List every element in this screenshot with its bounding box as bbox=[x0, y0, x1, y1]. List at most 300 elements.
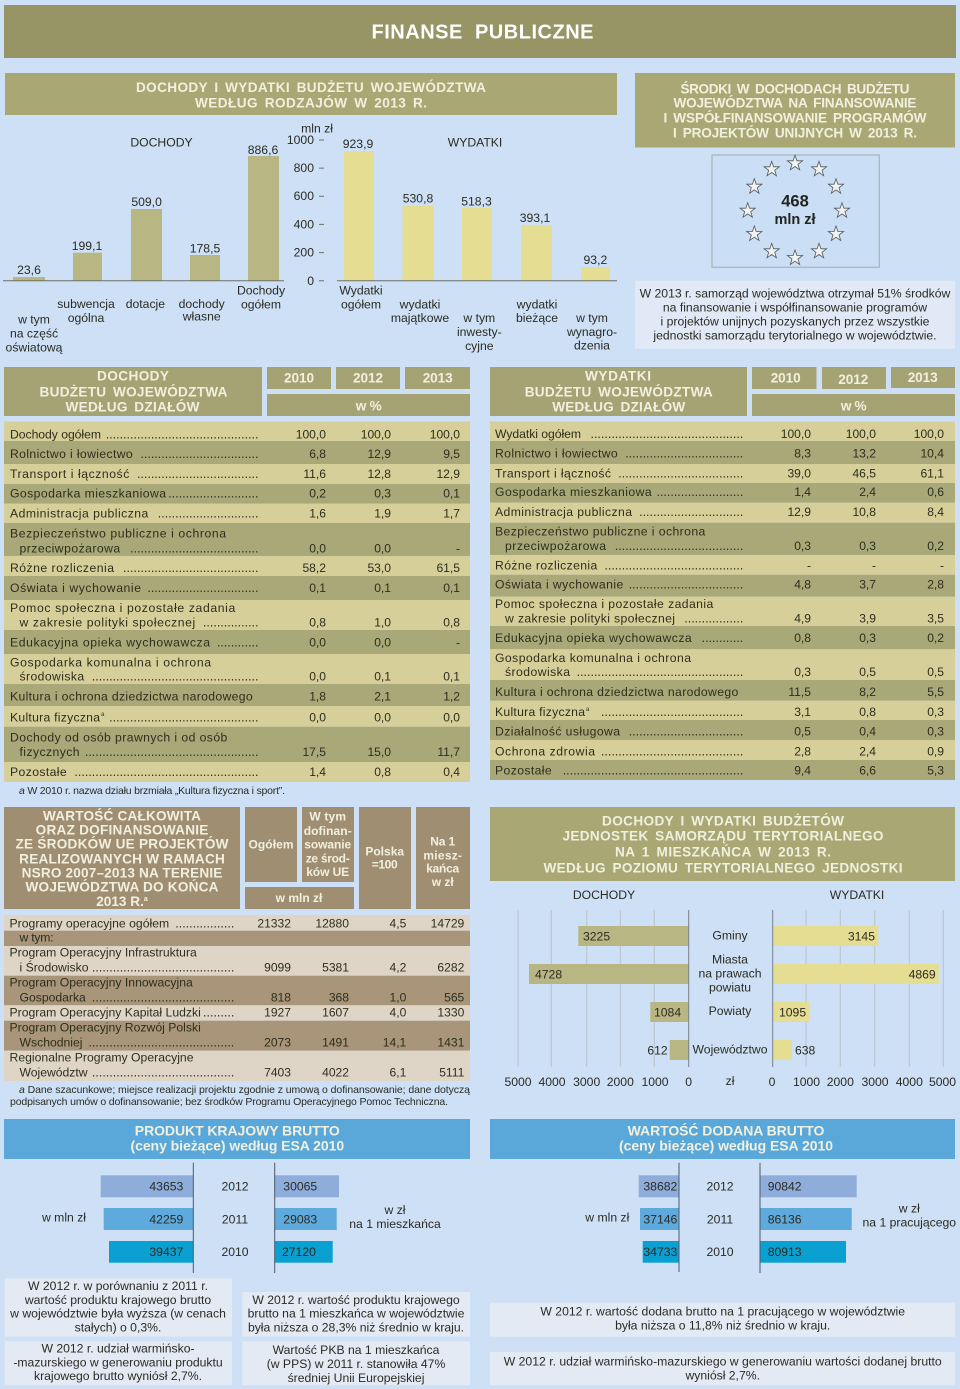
heading: gross value added: WARTOŚĆ DODANA BRUTTO bbox=[628, 1121, 824, 1138]
bar chart: revenue: ogółem bbox=[241, 298, 281, 312]
table header: EU projects: Na 1 bbox=[430, 834, 456, 848]
row: public safety: Bezpieczeństwo publiczne i ochrona bbox=[495, 524, 706, 538]
heading: per capita: DOCHODY I WYDATKI BUDŻETÓW bbox=[602, 813, 844, 828]
row: physical culture: 0,0 bbox=[374, 710, 391, 724]
row: income from persons: 15,0 bbox=[367, 745, 391, 759]
row: culture bbox=[4, 684, 470, 706]
panel: gross value added bbox=[490, 1119, 956, 1385]
row: infrastructure and environment: ......................................... bbox=[92, 961, 234, 975]
row: housing: 1,4 bbox=[794, 485, 811, 499]
table header: expenditure: 2010 bbox=[771, 371, 801, 386]
row: culture: 8,2 bbox=[859, 685, 876, 699]
row: education: 0,1 bbox=[443, 581, 460, 595]
row: total: ............................................ bbox=[106, 428, 258, 442]
heading: per capita: JEDNOSTEK SAMORZĄDU TERYTORIALNEGO bbox=[562, 829, 884, 844]
table header: revenue: 2010 bbox=[284, 371, 314, 386]
callout: EU funds note: i projektów unijnych pozyskanych przez wszystkie bbox=[661, 314, 930, 328]
bar chart: expenditure per capita: 4869 bbox=[909, 968, 936, 982]
panel: budget revenue and expenditure by type bbox=[3, 73, 617, 354]
bar chart: GDP per capita: 30065 bbox=[283, 1179, 317, 1193]
row: municipal economy: Gospodarka komunalna i ochrona bbox=[495, 651, 691, 665]
bar chart: GDP per capita: na 1 mieszkańca bbox=[349, 1217, 441, 1231]
row: social assistance: Pomoc społeczna i pozostałe zadania bbox=[495, 597, 714, 611]
row: settlements: ........................................ bbox=[604, 558, 743, 572]
row: regional programmes: Województw bbox=[20, 1066, 88, 1080]
bar chart: expenditure: bieżące bbox=[516, 311, 558, 325]
chart axis: zloty: 5000 bbox=[929, 1075, 956, 1089]
row: educational care: ............ bbox=[217, 636, 258, 650]
row: total: ............................................ bbox=[590, 427, 743, 441]
table header: EU projects: w zł bbox=[431, 875, 454, 889]
bar chart: revenue: ogólna bbox=[68, 311, 105, 325]
row: physical culture: Kultura fizyczna bbox=[495, 705, 585, 719]
row: public administration: .............................. bbox=[639, 505, 743, 519]
row: agriculture: 8,3 bbox=[794, 446, 811, 460]
row: educational care: - bbox=[456, 636, 460, 650]
row: total: 100,0 bbox=[430, 428, 460, 442]
row: transport bbox=[4, 464, 470, 484]
heading: per capita: WEDŁUG POZIOMU TERYTORIALNEGO JEDNOSTKI bbox=[544, 861, 902, 876]
row: physical culture bbox=[4, 706, 470, 727]
row: education: ................................ bbox=[147, 581, 258, 595]
row: education: 4,8 bbox=[794, 578, 811, 592]
bar chart: revenue: w tym bbox=[17, 312, 50, 326]
table header: EU projects bbox=[4, 807, 470, 909]
row: physical culture bbox=[490, 701, 955, 720]
row: housing: ......................... bbox=[656, 485, 743, 499]
row: innovative economy: Gospodarka bbox=[20, 991, 86, 1005]
row: settlements: Różne rozliczenia bbox=[10, 561, 114, 575]
bar chart: GDP in million zloty: w mln zł bbox=[41, 1210, 86, 1224]
row: settlements: Różne rozliczenia bbox=[495, 558, 598, 572]
row: public safety: 0,2 bbox=[927, 539, 944, 553]
bar chart: revenue: oświatową bbox=[6, 340, 63, 354]
row: public safety: 0,0 bbox=[309, 541, 326, 555]
bar chart: revenue: 199,1 bbox=[72, 239, 102, 253]
callout: value added per worker: była niższa o 11,8% niż średnio w kraju. bbox=[615, 1318, 830, 1332]
row: total: 100,0 bbox=[846, 427, 876, 441]
row: public safety: przeciwpożarowa bbox=[20, 541, 120, 555]
row: public safety: Bezpieczeństwo publiczne i ochrona bbox=[10, 527, 226, 541]
table header: EU projects: REALIZOWANYCH W RAMACH bbox=[19, 851, 225, 866]
row: eastern Poland: 1491 bbox=[322, 1036, 349, 1050]
row: educational care: Edukacyjna opieka wychowawcza bbox=[495, 631, 692, 645]
row: physical culture: 0,3 bbox=[927, 705, 944, 719]
row: municipal economy: 0,5 bbox=[859, 665, 876, 679]
callout: GDP per capita: była niższa o 28,3% niż średnio w kraju. bbox=[248, 1320, 464, 1334]
bar chart: value added per worker: 80913 bbox=[768, 1245, 802, 1259]
row: agriculture: .................................. bbox=[140, 447, 258, 461]
row: eastern Poland bbox=[4, 1021, 470, 1051]
row: innovative economy: 368 bbox=[329, 991, 349, 1005]
row: agriculture: Rolnictwo i łowiectwo bbox=[495, 446, 618, 460]
row: regional programmes: 7403 bbox=[264, 1066, 291, 1080]
callout: GDP in PPS bbox=[242, 1341, 470, 1385]
row: other: 1,4 bbox=[309, 765, 326, 779]
row: infrastructure and environment: i Środowisko bbox=[20, 960, 89, 975]
bar chart: expenditure: dzenia bbox=[574, 338, 610, 352]
callout: EU funds note: jednostki samorządu terytorialnego w województwie. bbox=[652, 328, 937, 342]
heading: EU funds: WOJEWÓDZTWA NA FINANSOWANIE bbox=[674, 96, 916, 111]
row: income from persons: 11,7 bbox=[437, 745, 460, 759]
row: health care: 2,4 bbox=[859, 744, 876, 758]
row: social assistance: w zakresie polityki społecznej bbox=[18, 616, 195, 630]
row: services: 0,3 bbox=[927, 724, 944, 738]
table header: EU projects: a bbox=[144, 896, 148, 903]
row: agriculture bbox=[490, 441, 955, 464]
row: education bbox=[4, 576, 470, 600]
bar chart: expenditure per capita: 3145 bbox=[848, 930, 875, 944]
row: settlements: 61,5 bbox=[436, 561, 460, 575]
row: municipal economy: ................................................ bbox=[577, 665, 743, 679]
chart axis: zloty: 3000 bbox=[861, 1075, 889, 1089]
heading: budget by type: WEDŁUG RODZAJÓW W 2013 R. bbox=[195, 95, 427, 110]
row: municipal economy: 0,1 bbox=[443, 670, 460, 684]
table header: EU projects: W tym bbox=[309, 810, 346, 824]
row: agriculture: 10,4 bbox=[920, 446, 944, 460]
row: income from persons bbox=[4, 727, 470, 762]
table header: EU projects: ków UE bbox=[306, 865, 349, 879]
row: municipal economy: środowiska bbox=[20, 670, 84, 684]
row: transport: 12,9 bbox=[436, 467, 460, 481]
row: other: Pozostałe bbox=[495, 764, 552, 778]
row: regional programmes: Regionalne Programy Operacyjne bbox=[10, 1051, 194, 1065]
heading: GDP: PRODUKT KRAJOWY BRUTTO bbox=[135, 1122, 340, 1138]
callout: GDP in PPS: Wartość PKB na 1 mieszkańca bbox=[273, 1343, 440, 1357]
bar chart: revenue per capita: 1084 bbox=[654, 1006, 681, 1020]
row: social assistance: 4,9 bbox=[794, 612, 811, 626]
heading: budget by type bbox=[5, 73, 617, 115]
row: operational programmes total: Programy operacyjne ogółem bbox=[10, 916, 169, 930]
row: physical culture: Kultura fizyczna bbox=[10, 710, 100, 724]
chart axis: zloty: 4000 bbox=[538, 1075, 566, 1089]
row: innovative economy bbox=[4, 976, 470, 1005]
table header: EU projects: miesz- bbox=[423, 848, 462, 862]
callout: GDP share: W 2012 r. udział warmińsko- bbox=[41, 1342, 195, 1356]
bar chart: revenue: 178,5 bbox=[190, 242, 220, 256]
row: educational care: 0,8 bbox=[794, 631, 811, 645]
heading: EU funds: I PROJEKTÓW UNIJNYCH W 2013 R. bbox=[673, 126, 917, 141]
row: other bbox=[4, 762, 470, 782]
row: settlements bbox=[490, 555, 955, 575]
table header: revenue: DOCHODY bbox=[97, 369, 169, 384]
callout: value added share: W 2012 r. udział warmińsko-mazurskiego w generowaniu wartości dodanej brutto bbox=[504, 1354, 942, 1368]
row: operational programmes total bbox=[4, 915, 470, 931]
row: public safety bbox=[490, 523, 955, 555]
callout: GDP share: -mazurskiego w generowaniu produktu bbox=[13, 1356, 223, 1370]
row: public administration: Administracja publiczna bbox=[495, 505, 632, 519]
row: infrastructure and environment: 5381 bbox=[322, 961, 349, 975]
panel: GDP bbox=[4, 1119, 470, 1385]
chart axis: zloty: 0 bbox=[769, 1075, 776, 1089]
table header: EU projects: =100 bbox=[372, 858, 398, 872]
row: services: 0,4 bbox=[859, 724, 876, 738]
callout: EU funds note: na finansowanie i współfinansowanie programów bbox=[663, 301, 927, 315]
row: eastern Poland: Wschodniej bbox=[20, 1036, 82, 1050]
row: other: .................................................... bbox=[563, 764, 743, 778]
row: transport: Transport i łączność bbox=[10, 467, 129, 481]
table header: EU projects: Polska bbox=[365, 844, 404, 858]
row: human capital: 1927 bbox=[264, 1006, 291, 1020]
table header: revenue bbox=[4, 367, 470, 416]
footnote: EU projects: podpisanych umów o dofinansowanie; bez środków Programu Operacyjnego Pomoc Techniczna. bbox=[10, 1096, 448, 1108]
bar chart: expenditure: Wydatki bbox=[339, 284, 383, 298]
row: agriculture: Rolnictwo i łowiectwo bbox=[10, 447, 133, 461]
chart axis: zloty: 0 bbox=[685, 1075, 692, 1089]
row: culture: 5,5 bbox=[927, 685, 944, 699]
row: housing: 0,3 bbox=[374, 486, 391, 500]
row: physical culture: ......................................... bbox=[601, 705, 743, 719]
table header: EU projects: ORAZ DOFINANSOWANIE bbox=[36, 823, 208, 838]
row: physical culture: a bbox=[586, 707, 590, 713]
heading: gross value added: (ceny bieżące) według ESA 2010 bbox=[619, 1138, 833, 1154]
row: health care: 2,8 bbox=[794, 744, 811, 758]
bar chart: expenditure: inwesty- bbox=[457, 325, 502, 339]
row: social assistance bbox=[490, 597, 955, 626]
row: operational programmes total: ................. bbox=[175, 916, 234, 930]
row: settlements: ....................................... bbox=[123, 561, 258, 575]
row: social assistance bbox=[4, 600, 470, 630]
row: settlements: 58,2 bbox=[302, 561, 326, 575]
table header: EU projects: ZE ŚRODKÓW UE PROJEKTÓW bbox=[16, 837, 229, 852]
row: social assistance: 0,8 bbox=[443, 616, 460, 630]
chart axis: million zloty bbox=[287, 122, 333, 288]
row: public safety bbox=[4, 523, 470, 556]
row: services: ................................. bbox=[629, 724, 743, 738]
bar chart: expenditure: 93,2 bbox=[584, 253, 607, 267]
row: education: Oświata i wychowanie bbox=[495, 578, 624, 592]
bar chart: expenditure per capita bbox=[773, 888, 939, 1067]
row: education: 3,7 bbox=[859, 578, 876, 592]
row: human capital: 4,0 bbox=[389, 1006, 407, 1020]
table header: EU projects: 2013 R. bbox=[96, 894, 144, 909]
bar chart: revenue: 886,6 bbox=[248, 143, 278, 157]
row: transport bbox=[490, 464, 955, 483]
row: physical culture: 0,8 bbox=[859, 705, 876, 719]
bar chart: revenue: na część bbox=[10, 326, 58, 340]
chart axis: zloty: 4000 bbox=[896, 1075, 923, 1089]
row: housing: 0,2 bbox=[309, 486, 326, 500]
chart axis: million zloty: 600 bbox=[294, 189, 314, 203]
bar chart: GDP per capita: 27120 bbox=[282, 1245, 316, 1259]
bar chart: revenue: DOCHODY bbox=[130, 136, 193, 150]
year labels: 2012 bbox=[706, 1179, 734, 1193]
heading: per capita: NA 1 MIESZKAŃCA W 2013 R. bbox=[615, 845, 831, 860]
row: public administration: 12,9 bbox=[787, 505, 811, 519]
callout: GDP growth: W 2012 r. w porównaniu z 2011 r. bbox=[28, 1279, 208, 1293]
row: human capital: 1607 bbox=[322, 1006, 349, 1020]
row: public safety: - bbox=[456, 541, 460, 555]
row: human capital bbox=[4, 1005, 470, 1021]
heading: per capita bbox=[490, 807, 955, 881]
row: housing bbox=[4, 484, 470, 504]
callout: GDP in PPS: (w PPS) w 2011 r. stanowiła 47% bbox=[267, 1357, 445, 1371]
row: municipal economy: 0,5 bbox=[927, 665, 944, 679]
row: transport: Transport i łączność bbox=[495, 466, 611, 480]
row: other: Pozostałe bbox=[10, 765, 67, 779]
bar chart: expenditure: majątkowe bbox=[391, 311, 449, 325]
year labels: 2010 bbox=[221, 1245, 249, 1259]
row: infrastructure and environment: Program Operacyjny Infrastruktura bbox=[10, 946, 197, 960]
table: revenue by division bbox=[4, 367, 470, 782]
year labels: 2011 bbox=[222, 1212, 248, 1226]
bar chart: value added in million zloty: w mln zł bbox=[584, 1210, 630, 1224]
table header: expenditure: BUDŻETU WOJEWÓDZTWA bbox=[525, 385, 713, 400]
row: public safety: 0,3 bbox=[794, 539, 811, 553]
row: agriculture bbox=[4, 441, 470, 464]
title banner bbox=[4, 5, 956, 58]
bar chart: expenditure bbox=[337, 136, 617, 353]
row: regional programmes: ......................................... bbox=[92, 1066, 234, 1080]
row: income from persons: 17,5 bbox=[302, 745, 326, 759]
row: settlements: - bbox=[872, 558, 876, 572]
heading: budget by type: DOCHODY I WYDATKI BUDŻETU WOJEWÓDZTWA bbox=[136, 80, 486, 95]
bar chart: expenditure: WYDATKI bbox=[448, 136, 502, 150]
table header: EU projects: Ogółem bbox=[248, 838, 294, 852]
row: transport: .................................... bbox=[618, 466, 743, 480]
bar chart: expenditure per capita: 1095 bbox=[779, 1006, 806, 1020]
bar chart: revenue bbox=[3, 136, 286, 354]
panel: revenue and expenditure per capita by territorial level bbox=[490, 807, 956, 1089]
row: innovative economy: ......................................... bbox=[92, 991, 234, 1005]
table header: expenditure: w % bbox=[840, 399, 867, 414]
row: health care bbox=[490, 740, 955, 760]
row: municipal economy bbox=[4, 654, 470, 684]
table header: EU projects: kańca bbox=[426, 862, 460, 876]
row: municipal economy: ................................................ bbox=[92, 670, 258, 684]
bar chart: revenue: Dochody bbox=[237, 284, 286, 298]
category labels: powiatu bbox=[709, 980, 751, 994]
year labels: 2012 bbox=[221, 1179, 249, 1193]
callout: GDP per capita: brutto na 1 mieszkańca w województwie bbox=[248, 1306, 465, 1320]
row: social assistance: 3,5 bbox=[927, 612, 944, 626]
row: social assistance: ................ bbox=[203, 616, 258, 630]
callout: GDP growth: stałych) o 0,3%. bbox=[75, 1320, 161, 1334]
row: housing: Gospodarka mieszkaniowa bbox=[495, 485, 652, 499]
table header: EU projects: WOJEWÓDZTWA DO KOŃCA bbox=[26, 879, 219, 894]
row: transport: 11,6 bbox=[303, 467, 326, 481]
row: total: 100,0 bbox=[781, 427, 811, 441]
row: agriculture: 12,9 bbox=[367, 447, 391, 461]
bar chart: revenue: 23,6 bbox=[17, 263, 41, 277]
table header: EU projects: WARTOŚĆ CAŁKOWITA bbox=[43, 809, 201, 824]
bar chart: expenditure: cyjne bbox=[465, 339, 494, 353]
table header: expenditure: WYDATKI bbox=[585, 369, 651, 384]
bar chart: revenue per capita: 612 bbox=[647, 1044, 668, 1058]
row: health care: Ochrona zdrowia bbox=[495, 744, 595, 758]
bar chart: revenue: własne bbox=[182, 310, 221, 324]
bar chart: expenditure: w tym bbox=[462, 311, 495, 325]
icon: EU flag with 468 million zloty: mln zł bbox=[774, 212, 816, 228]
heading: GDP bbox=[4, 1119, 470, 1159]
year labels bbox=[706, 1179, 734, 1259]
chart axis: zloty: zł bbox=[726, 1074, 735, 1088]
row: culture: 2,1 bbox=[374, 690, 391, 704]
row: transport: 61,1 bbox=[920, 466, 944, 480]
icon: EU flag with 468 million zloty: 468 bbox=[781, 193, 809, 211]
row: other: 6,6 bbox=[859, 764, 876, 778]
chart axis: zloty: 3000 bbox=[573, 1075, 600, 1089]
bar chart: expenditure per capita: WYDATKI bbox=[830, 888, 884, 902]
bar chart: expenditure per capita: 638 bbox=[795, 1044, 816, 1058]
table header: EU projects: ze środ- bbox=[306, 851, 350, 865]
callout: GDP per capita: W 2012 r. wartość produktu krajowego bbox=[252, 1293, 460, 1307]
bar chart: expenditure: wynagro- bbox=[566, 325, 617, 339]
heading: GDP: (ceny bieżące) według ESA 2010 bbox=[130, 1138, 344, 1154]
table header: EU projects: NSRO 2007–2013 NA TERENIE bbox=[22, 865, 222, 880]
category labels bbox=[693, 928, 768, 1056]
row: public administration: 1,7 bbox=[443, 506, 460, 520]
row: educational care: 0,0 bbox=[374, 636, 391, 650]
row: of which: w tym: bbox=[18, 931, 54, 945]
bar chart: revenue per capita bbox=[529, 888, 689, 1067]
row: other: 0,4 bbox=[443, 765, 460, 779]
bar chart: revenue: subwencja bbox=[57, 297, 115, 311]
bar chart: expenditure: 518,3 bbox=[461, 194, 492, 208]
row: settlements: 53,0 bbox=[367, 561, 391, 575]
chart axis: million zloty: 200 bbox=[294, 246, 314, 260]
bar chart: expenditure: wydatki bbox=[399, 298, 440, 312]
row: operational programmes total: 21332 bbox=[257, 916, 291, 930]
row: physical culture: 3,1 bbox=[794, 705, 811, 719]
bar chart: revenue: dotacje bbox=[126, 297, 165, 311]
table header: revenue: WEDŁUG DZIAŁÓW bbox=[66, 400, 200, 415]
row: other: 9,4 bbox=[794, 764, 811, 778]
category labels: na prawach bbox=[698, 966, 762, 980]
row: physical culture: 0,0 bbox=[443, 710, 460, 724]
row: public administration: 1,6 bbox=[309, 506, 326, 520]
row: eastern Poland: 14,1 bbox=[383, 1036, 407, 1050]
callout: GDP growth bbox=[5, 1278, 232, 1337]
row: agriculture: 13,2 bbox=[852, 446, 876, 460]
row: services: 0,5 bbox=[794, 724, 811, 738]
row: public administration: Administracja publiczna bbox=[10, 506, 149, 520]
row: educational care: Edukacyjna opieka wychowawcza bbox=[10, 636, 210, 650]
row: educational care: 0,2 bbox=[927, 631, 944, 645]
bar chart: expenditure: 530,8 bbox=[403, 192, 433, 206]
row: physical culture: a bbox=[101, 712, 105, 718]
row: educational care bbox=[490, 626, 955, 649]
bar chart: value added per worker: 86136 bbox=[768, 1212, 802, 1226]
row: educational care: 0,0 bbox=[309, 636, 326, 650]
row: municipal economy bbox=[490, 649, 955, 680]
bar chart: value added in million zloty: 34733 bbox=[643, 1245, 678, 1259]
table header: EU projects: w mln zł bbox=[275, 891, 323, 905]
row: social assistance: 0,8 bbox=[309, 616, 326, 630]
row: infrastructure and environment: 6282 bbox=[437, 961, 465, 975]
row: housing: .......................... bbox=[168, 486, 258, 500]
row: culture: Kultura i ochrona dziedzictwa narodowego bbox=[10, 690, 253, 704]
table: expenditure by division bbox=[490, 367, 955, 780]
row: municipal economy: 0,1 bbox=[374, 670, 391, 684]
row: culture: 1,8 bbox=[309, 690, 326, 704]
bar chart: revenue per capita: DOCHODY bbox=[573, 888, 635, 902]
chart axis: million zloty: mln zł bbox=[301, 122, 333, 136]
row: social assistance: 1,0 bbox=[374, 616, 391, 630]
year labels: 2010 bbox=[706, 1245, 734, 1259]
chart axis: million zloty: 0 bbox=[307, 274, 314, 288]
callout: value added share: wyniósł 2,7%. bbox=[684, 1368, 760, 1382]
bar chart: GDP per capita bbox=[275, 1163, 441, 1273]
row: innovative economy: 1,0 bbox=[389, 991, 407, 1005]
row: agriculture: 6,8 bbox=[309, 447, 326, 461]
year labels bbox=[221, 1179, 249, 1259]
row: educational care: 0,3 bbox=[859, 631, 876, 645]
row: total: 100,0 bbox=[914, 427, 944, 441]
row: eastern Poland: 2073 bbox=[264, 1036, 291, 1050]
row: social assistance: 3,9 bbox=[859, 612, 876, 626]
row: settlements: - bbox=[940, 558, 944, 572]
